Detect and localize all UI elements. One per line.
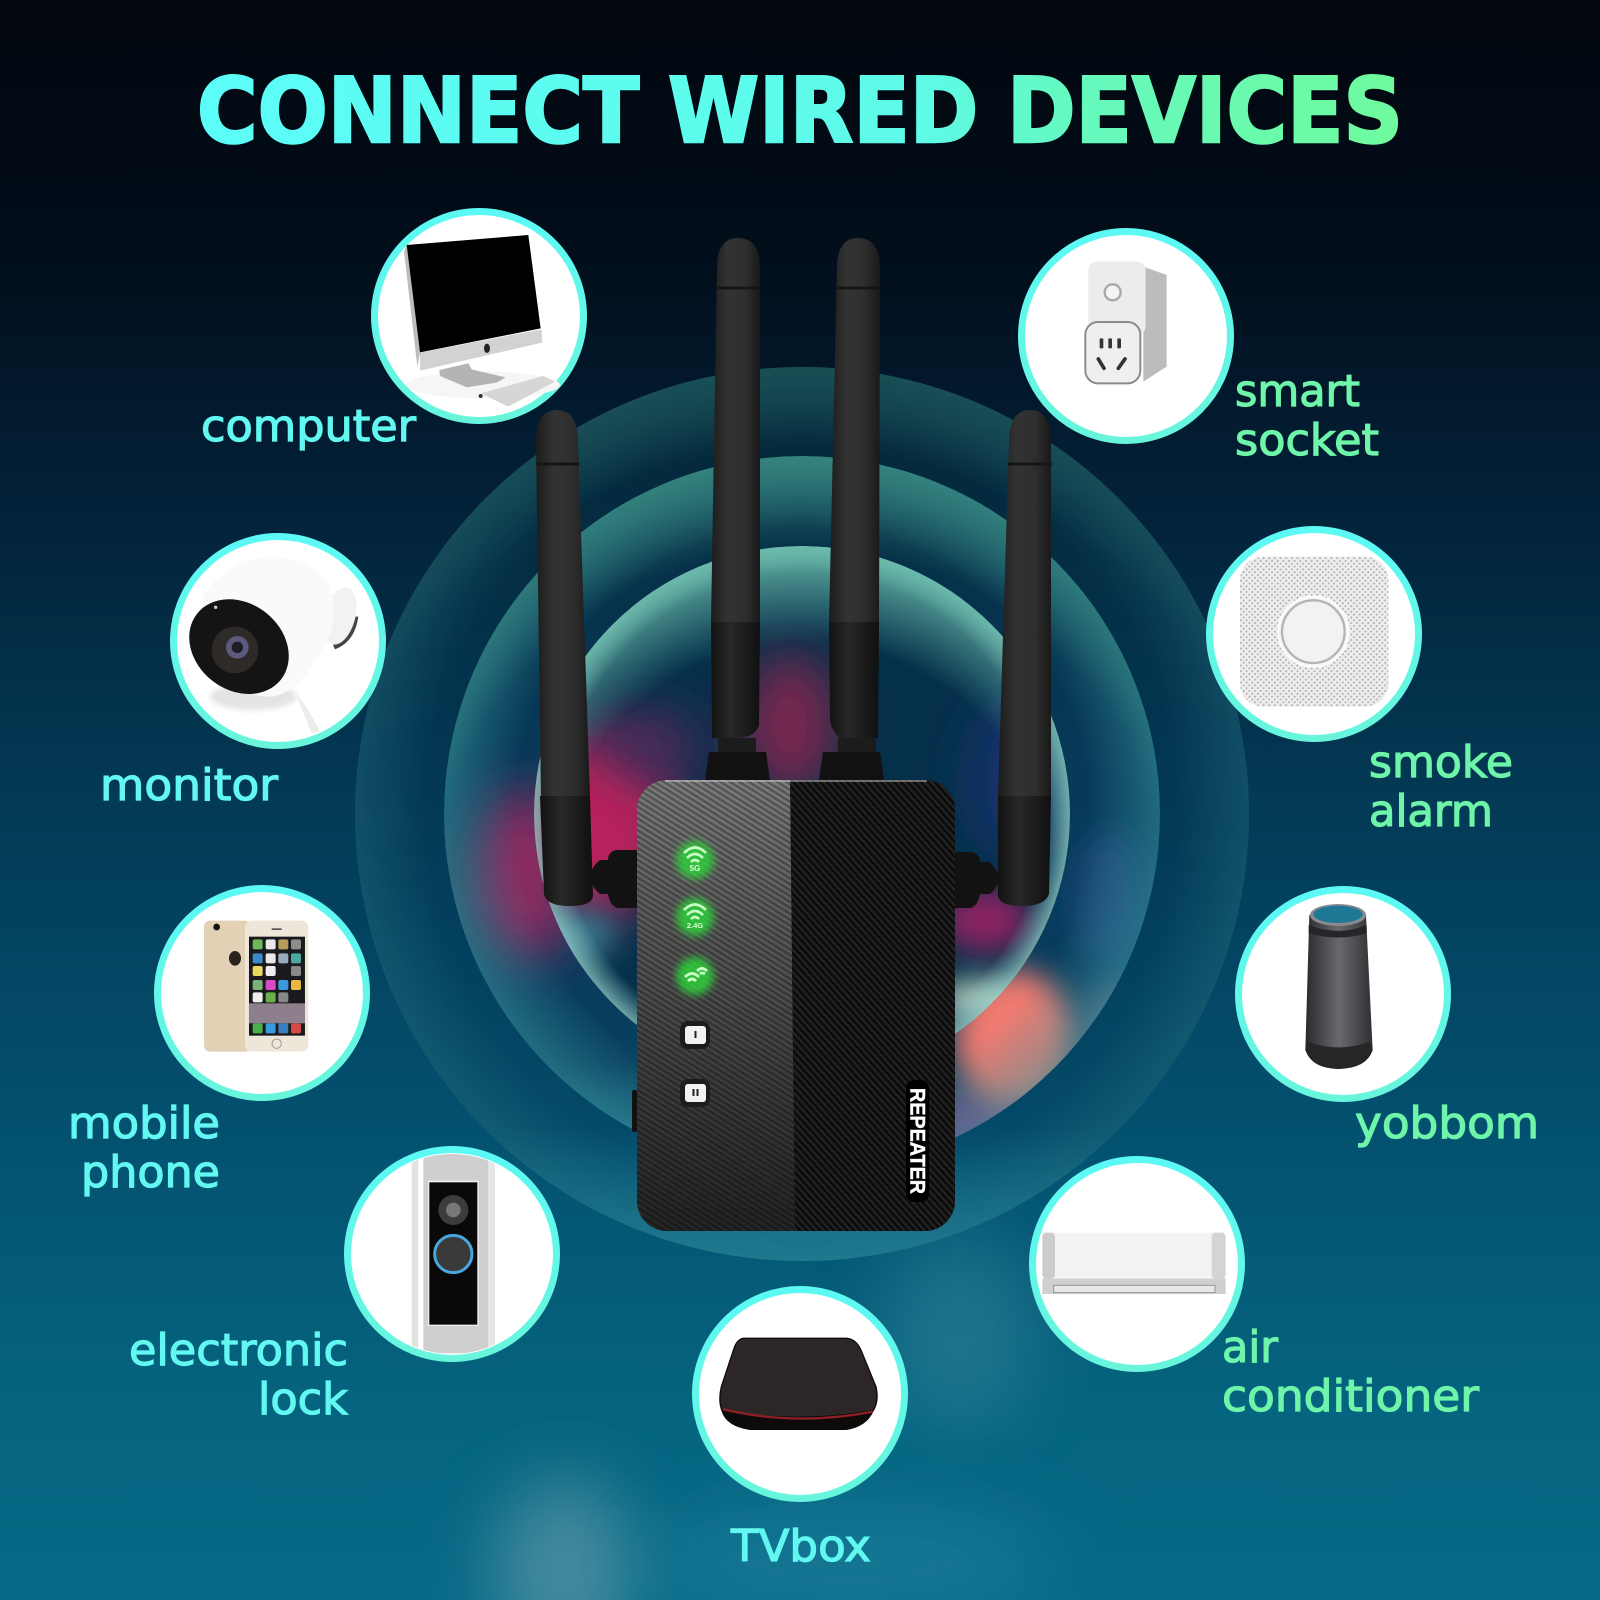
label: electronic lock: lock — [258, 1374, 349, 1425]
label: electronic lock — [129, 1325, 349, 1425]
device: smoke alarm — [1210, 530, 1418, 738]
second antenna — [705, 238, 770, 780]
device body left half — [637, 780, 795, 1231]
device: mobile phone — [158, 888, 366, 1098]
label: mobile phone: mobile — [68, 1098, 220, 1149]
led: lan 1 — [680, 1021, 710, 1049]
antennas — [536, 238, 1052, 908]
led: lan 2 — [680, 1079, 710, 1107]
device body right half — [790, 780, 955, 1231]
led: 2.4G — [676, 898, 714, 936]
label: air conditioner: conditioner — [1222, 1371, 1480, 1422]
label: mobile phone — [68, 1098, 220, 1198]
repeater label: REPEATER — [906, 1088, 928, 1194]
icon: doorbell — [412, 1150, 495, 1353]
device: tv box — [696, 1290, 904, 1498]
label: yobbom: yobbom — [1355, 1098, 1539, 1149]
label: computer: computer — [201, 401, 417, 452]
icon: speaker — [1305, 904, 1373, 1069]
label: smart socket: socket — [1235, 415, 1379, 466]
title: CONNECT WIRED DEVICES — [197, 59, 1403, 164]
label: monitor: monitor — [100, 760, 279, 811]
label: smart socket — [1235, 366, 1379, 466]
label: TVbox: TVbox — [730, 1521, 871, 1572]
concentric signal rings — [355, 367, 1249, 1261]
label: electronic lock: electronic — [129, 1325, 348, 1376]
icon: tv box — [719, 1338, 878, 1430]
inner ring — [515, 546, 1070, 1082]
left connector — [590, 850, 637, 908]
middle ring — [444, 456, 1160, 1172]
led: 5G — [676, 841, 714, 879]
icon: socket — [1085, 262, 1167, 383]
third antenna — [819, 238, 884, 780]
led: 5G: 5G — [690, 864, 700, 873]
label: mobile phone: phone — [81, 1147, 220, 1198]
icon: camera — [170, 557, 362, 733]
right connector — [953, 852, 1000, 908]
led: repeater link — [676, 957, 714, 995]
device: yobbom speaker — [1238, 890, 1448, 1098]
far right antenna — [998, 410, 1052, 906]
label: smoke alarm — [1369, 737, 1513, 837]
label: air conditioner: air — [1222, 1322, 1279, 1373]
label: air conditioner — [1222, 1322, 1480, 1422]
outer ring — [355, 367, 1249, 1261]
far left antenna — [536, 410, 593, 906]
label: smoke alarm: alarm — [1369, 786, 1493, 837]
icon: phones — [204, 921, 308, 1052]
device: smart socket — [1022, 232, 1230, 440]
repeater device — [632, 780, 955, 1231]
device: air conditioner — [1032, 1160, 1242, 1368]
label: smoke alarm: smoke — [1369, 737, 1513, 788]
led: 2.4G: 2.4G — [687, 921, 703, 930]
label: smart socket: smart — [1235, 366, 1360, 417]
device: monitor camera — [170, 536, 382, 746]
device: electronic lock — [348, 1150, 556, 1358]
icon: computer — [404, 235, 560, 407]
device: computer — [374, 212, 584, 420]
icon: smoke alarm — [1240, 557, 1388, 707]
icon: air conditioner — [1042, 1233, 1226, 1294]
